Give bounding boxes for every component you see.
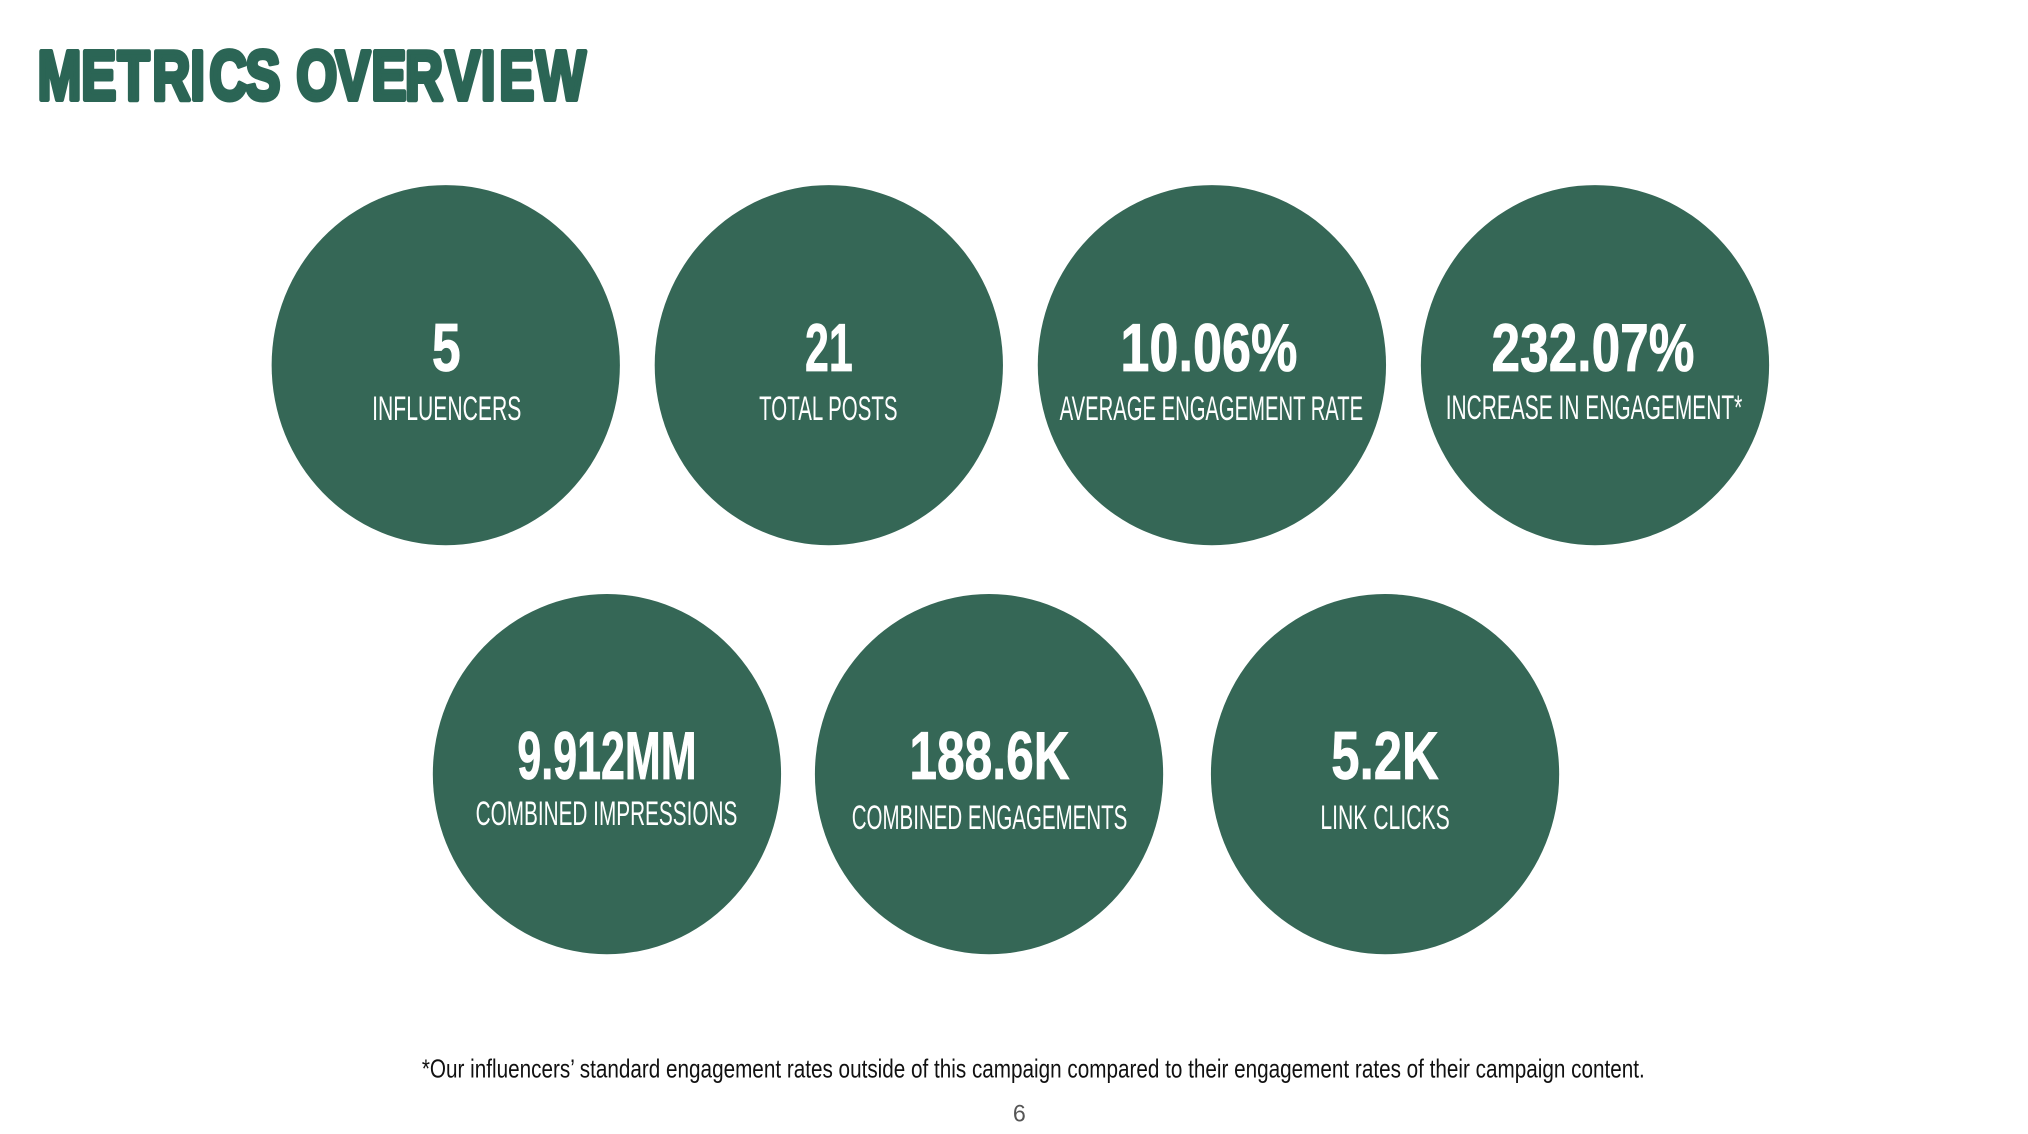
metric: link clicks — [1211, 594, 1559, 954]
circle — [433, 594, 781, 954]
value: 5 — [432, 311, 461, 386]
metric: total posts — [655, 185, 1003, 545]
metric: combined engagements — [815, 594, 1163, 954]
label: INFLUENCERS — [372, 390, 521, 428]
circle — [1421, 185, 1769, 545]
circle — [815, 594, 1163, 954]
label: COMBINED ENGAGEMENTS — [852, 799, 1127, 837]
circle — [1211, 594, 1559, 954]
circle — [272, 185, 620, 545]
circle — [1038, 185, 1386, 545]
value: 21 — [805, 311, 853, 386]
metric: increase in engagement — [1421, 185, 1769, 545]
value: 232.07% — [1492, 311, 1694, 386]
label: TOTAL POSTS — [759, 390, 897, 428]
value: 9.912MM — [517, 719, 697, 794]
metric: influencers — [272, 185, 620, 545]
label: INCREASE IN ENGAGEMENT* — [1446, 389, 1742, 427]
label: AVERAGE ENGAGEMENT RATE — [1060, 390, 1363, 428]
label: LINK CLICKS — [1320, 799, 1450, 837]
value: 5.2K — [1331, 719, 1439, 794]
metric: combined impressions — [433, 594, 781, 954]
title: METRICS OVERVIEW — [38, 37, 586, 115]
label: COMBINED IMPRESSIONS — [476, 795, 737, 833]
footnote: *Our influencers’ standard engagement rates outside of this campaign compared to their engagement rates of their campaign content. — [422, 1056, 1645, 1084]
value: 188.6K — [909, 719, 1070, 794]
value: 10.06% — [1120, 311, 1297, 386]
metric: average engagement rate — [1038, 185, 1386, 545]
page number: 6 — [1013, 1100, 1026, 1127]
circle — [655, 185, 1003, 545]
